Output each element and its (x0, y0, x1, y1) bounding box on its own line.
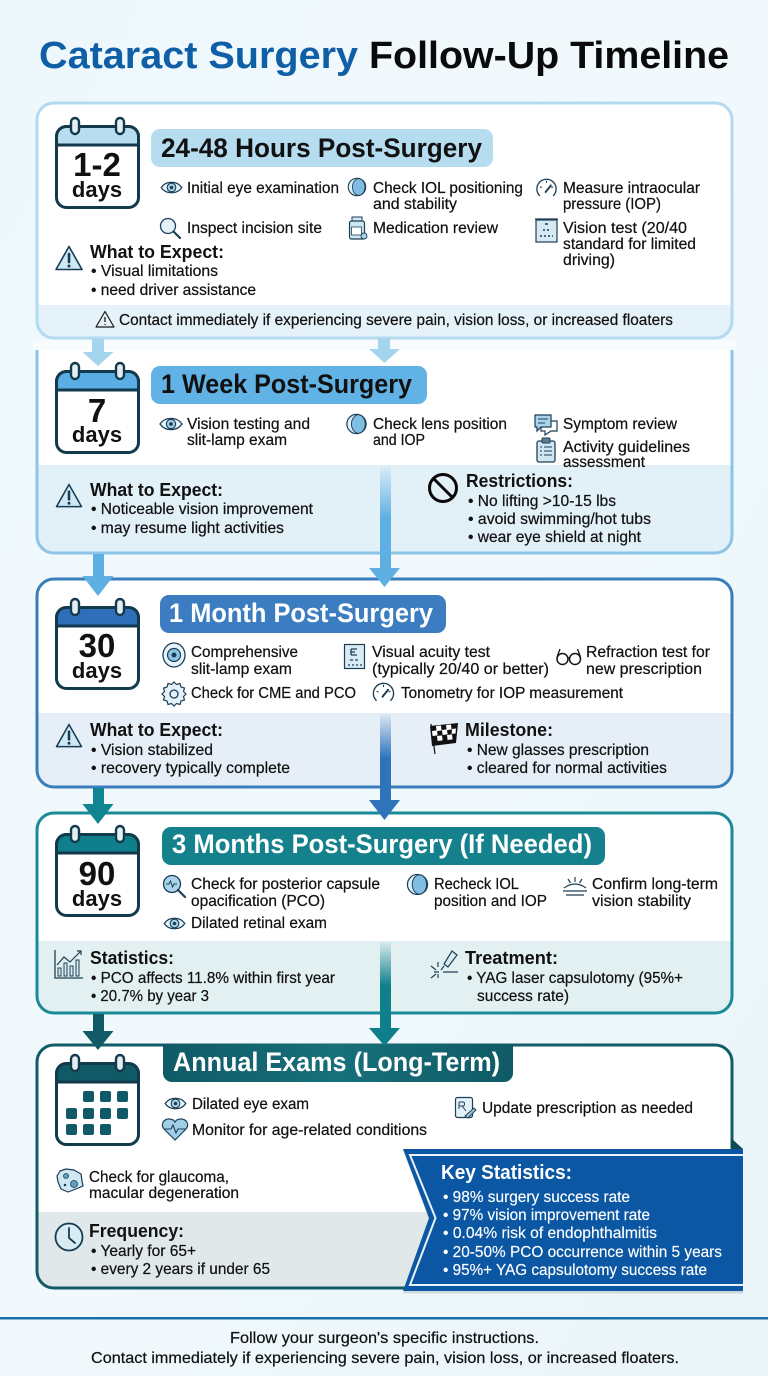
what to expect: • recovery typically complete (91, 760, 290, 777)
what to expect: What to Expect: (90, 719, 223, 740)
treatment: • YAG laser capsulotomy (95%+ (467, 970, 683, 987)
calendar: 1-2 days: days (72, 177, 122, 202)
item: inspect incision site: Inspect incision site (187, 220, 322, 237)
restrictions (430, 470, 651, 546)
item: visual acuity test: (typically 20/40 or better) (372, 661, 549, 678)
milestone (430, 719, 667, 777)
item: vision testing: slit-lamp exam (187, 432, 287, 449)
item: activity guidelines (537, 438, 690, 471)
banner: key statistics: • 0.04% risk of endophthalmitis (443, 1225, 657, 1242)
footer note: Contact immediately if experiencing severe pain, vision loss, or increased floaters. (91, 1350, 679, 1367)
heading: annual exams: Annual Exams (Long-Term) (173, 1047, 500, 1077)
heading: 1 week: 1 Week Post-Surgery (161, 369, 412, 399)
item: comprehensive slit-lamp exam: slit-lamp exam (191, 661, 292, 678)
item: check lens position: Check lens position (373, 416, 507, 433)
what to expect (56, 479, 314, 537)
item: comprehensive slit-lamp exam: Comprehensive (191, 644, 298, 661)
calendar: 7 days: days (72, 422, 122, 447)
milestone: Milestone: (465, 719, 553, 740)
item: recheck IOL (407, 874, 547, 910)
statistics: • 20.7% by year 3 (91, 988, 209, 1005)
panel: 1 week post-surgery (33, 340, 736, 553)
item: long-term vision stability: Confirm long-term (592, 876, 718, 893)
item: long-term vision stability: vision stability (592, 893, 691, 910)
calendar: monthly grid (56, 1055, 138, 1144)
calendar: 7 days: 7 (88, 392, 106, 429)
arrow: month 1 center line (380, 466, 391, 570)
item: check lens position: and IOP (373, 432, 425, 449)
calendar: 30 days: 30 (79, 627, 115, 664)
item: measure intraocular pressure (537, 179, 700, 213)
item: vision testing: Vision testing and (187, 416, 310, 433)
item: glaucoma and macular degeneration: Check for glaucoma, (89, 1169, 229, 1186)
calendar: 90 days: 90 (79, 855, 115, 892)
restrictions: • No lifting >10-15 lbs (468, 493, 616, 510)
item: check IOL positioning: and stability (373, 196, 457, 213)
what to expect: • may resume light activities (91, 520, 284, 537)
arrow: annual left (82, 1014, 114, 1050)
item: posterior capsule check: Check for posterior capsule (191, 876, 380, 893)
arrow: week 1 left (82, 339, 114, 366)
what to expect: • Vision stabilized (91, 742, 213, 759)
item: check IOL positioning: Check IOL positioning (373, 180, 523, 197)
treatment (431, 947, 683, 1005)
item: refraction test (557, 644, 710, 678)
calendar: 90 days: days (72, 886, 122, 911)
banner: key statistics: • 98% surgery success rate (443, 1189, 630, 1206)
item: recheck IOL: Recheck IOL (434, 876, 519, 893)
calendar: 7 days (56, 363, 138, 452)
footer rule (0, 1317, 768, 1320)
item: long-term vision stability (563, 876, 718, 910)
item: posterior capsule check: opacification (PCO) (191, 893, 325, 910)
item: refraction test: Refraction test for (586, 644, 710, 661)
title: Cataract Surgery (39, 35, 358, 77)
item: dilated retinal exam: Dilated retinal exam (191, 915, 327, 932)
arrow: month 3 center head (369, 800, 400, 820)
warning strip: Contact immediately if experiencing severe pain, vision loss, or increased floaters (119, 312, 673, 329)
arrow: week 1 center (369, 339, 400, 363)
item: medication review (350, 217, 499, 239)
item: visual acuity test: Visual acuity test (372, 644, 491, 661)
treatment: success rate) (477, 988, 569, 1005)
item: vision test (535, 219, 696, 269)
arrow: month 1 center head (369, 568, 400, 587)
item: activity guidelines: Activity guidelines (563, 439, 690, 456)
panel: 3 months post-surgery (37, 813, 732, 1013)
restrictions: Restrictions: (466, 470, 573, 491)
calendar: 1-2 days: 1-2 (73, 146, 121, 183)
panel: 1 month post-surgery (37, 579, 732, 787)
item: measure intraocular pressure: Measure intraocular (563, 180, 700, 197)
frequency (56, 1220, 270, 1278)
arrow: month 1 left (82, 554, 114, 596)
item: comprehensive slit-lamp exam (163, 643, 298, 678)
arrow: annual center line (380, 942, 391, 1030)
item: glaucoma and macular degeneration: macular degeneration (89, 1185, 239, 1202)
restrictions: • avoid swimming/hot tubs (468, 511, 651, 528)
calendar: 90 days (56, 826, 138, 916)
calendar: 1-2 days (56, 118, 138, 208)
banner: key statistics: • 97% vision improvement rate (443, 1207, 650, 1224)
milestone: • cleared for normal activities (467, 760, 667, 777)
item: check lens position (347, 414, 507, 449)
banner: key statistics: Key Statistics: (441, 1162, 572, 1184)
item: medication review: Medication review (373, 220, 499, 237)
item: symptom review (535, 415, 678, 435)
panel: 24-48 hours post-surgery (37, 103, 732, 338)
heading: 24-48 hours: 24-48 Hours Post-Surgery (161, 133, 482, 163)
arrow: annual center head (369, 1028, 400, 1046)
item: update prescription: Update prescription as needed (482, 1100, 693, 1117)
milestone: • New glasses prescription (467, 742, 649, 759)
item: activity guidelines: assessment (563, 454, 646, 471)
footer note (91, 1330, 679, 1367)
item: glaucoma and macular degeneration (57, 1169, 239, 1202)
calendar: 30 days (56, 599, 138, 688)
what to expect: • Visual limitations (91, 263, 218, 280)
item: recheck IOL: position and IOP (434, 893, 547, 910)
what to expect (56, 719, 290, 777)
calendar: 30 days: days (72, 658, 122, 683)
banner: key statistics (403, 1138, 743, 1294)
heading: 3 months: 3 Months Post-Surgery (If Needed) (172, 829, 592, 859)
title: Follow-Up Timeline (369, 35, 729, 77)
item: refraction test: new prescription (586, 661, 702, 678)
what to expect: • Noticeable vision improvement (91, 501, 314, 518)
banner: key statistics: • 20-50% PCO occurrence within 5 years (443, 1244, 722, 1261)
restrictions: • wear eye shield at night (468, 529, 642, 546)
item: vision test: standard for limited (563, 236, 696, 253)
item: symptom review: Symptom review (563, 416, 678, 433)
what to expect (56, 241, 256, 299)
footer note: Follow your surgeon's specific instructions. (230, 1330, 539, 1347)
arrow: month 3 left (82, 788, 114, 824)
statistics: • PCO affects 11.8% within first year (91, 970, 336, 987)
item: check IOL positioning (348, 178, 523, 213)
statistics (55, 947, 336, 1005)
title (39, 35, 729, 77)
frequency: Frequency: (89, 1220, 184, 1241)
item: tonometry: Tonometry for IOP measurement (401, 685, 624, 702)
arrow: month 3 center line (380, 714, 391, 802)
item: posterior capsule check (164, 876, 380, 910)
item: measure intraocular pressure: pressure (IOP) (563, 196, 661, 213)
what to expect: • need driver assistance (91, 282, 256, 299)
item: visual acuity test (344, 644, 549, 678)
frequency: • every 2 years if under 65 (91, 1261, 270, 1278)
banner: key statistics: • 95%+ YAG capsulotomy success rate (443, 1262, 707, 1279)
statistics: Statistics: (90, 947, 174, 968)
item: dilated eye exam: Dilated eye exam (192, 1096, 309, 1113)
item: vision testing (160, 416, 310, 449)
what to expect: What to Expect: (90, 241, 224, 262)
item: vision test: Vision test (20/40 (563, 220, 687, 237)
item: vision test: driving) (563, 252, 615, 269)
frequency: • Yearly for 65+ (91, 1243, 196, 1260)
item: check for CME and PCO (162, 682, 356, 706)
item: check for CME and PCO: Check for CME and PCO (191, 685, 356, 702)
what to expect: What to Expect: (90, 479, 223, 500)
heading: 1 month: 1 Month Post-Surgery (169, 598, 433, 628)
panel: annual exams (37, 1044, 732, 1288)
treatment: Treatment: (465, 947, 558, 968)
item: initial eye examination: Initial eye examination (187, 180, 339, 197)
item: monitor age-related conditions: Monitor for age-related conditions (192, 1122, 427, 1139)
